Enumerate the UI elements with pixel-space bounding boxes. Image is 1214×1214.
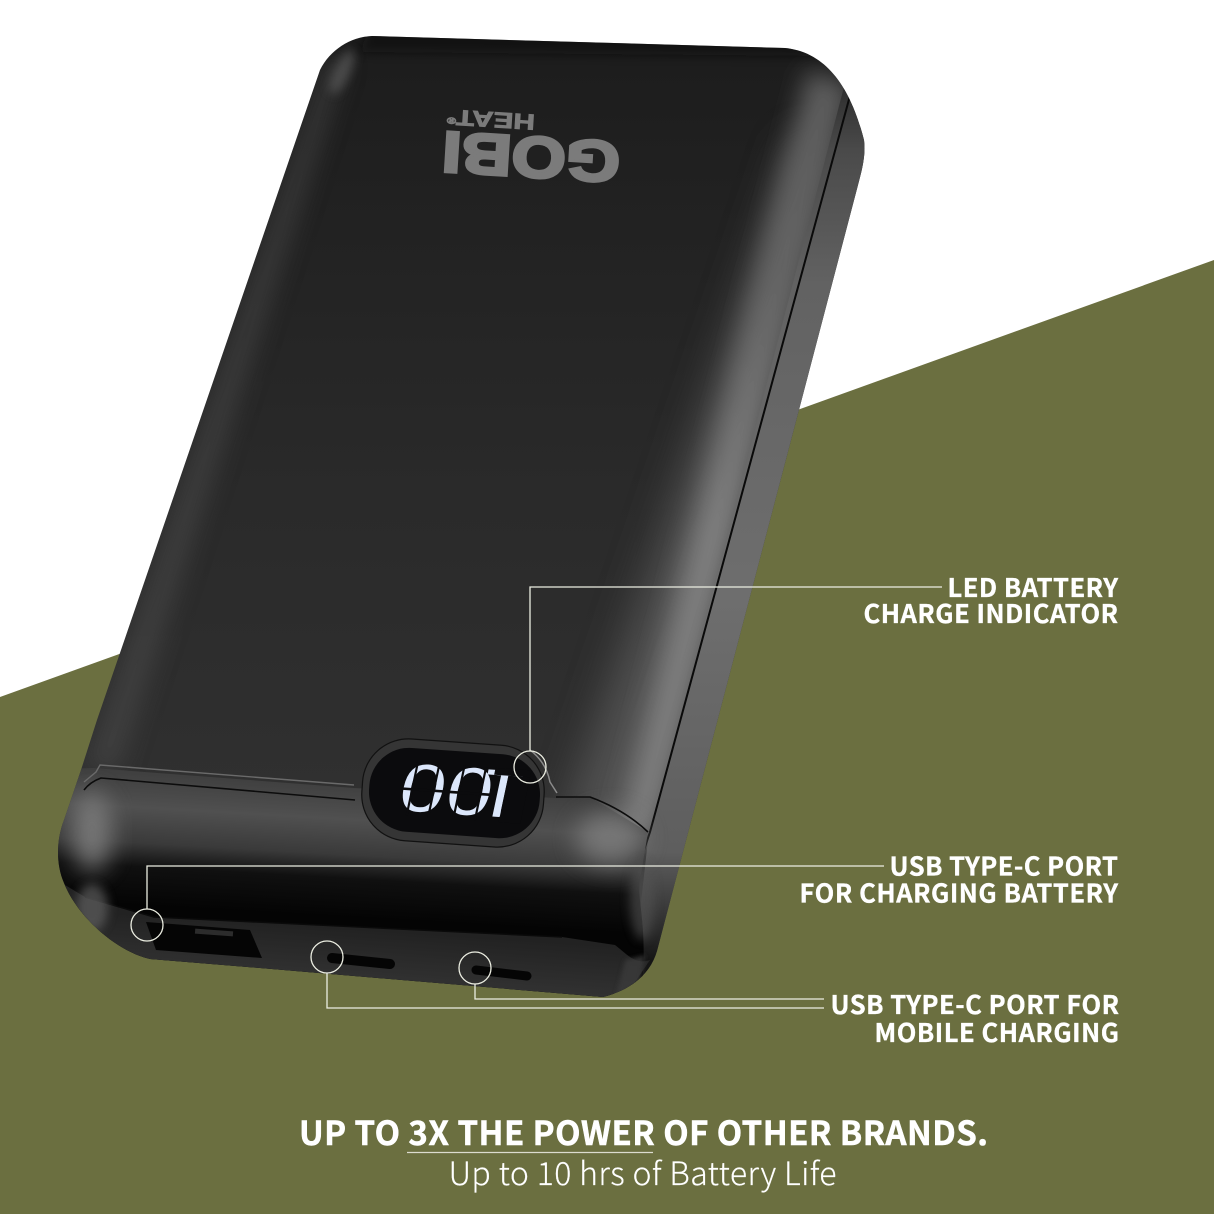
label: USB type-C port for mobile charging <box>830 985 1119 1050</box>
label: USB type-C port for charging battery: USB TYPE-C PORT <box>890 846 1118 884</box>
callout lines and markers <box>131 587 942 1008</box>
GOBI HEAT logo: ® <box>446 115 456 126</box>
callout: mobile charging leader two <box>459 952 824 999</box>
rail seam <box>640 92 851 862</box>
LED digits: 100 <box>393 749 533 833</box>
GOBI HEAT logo: HEAT <box>476 106 536 135</box>
USB-C port left <box>332 958 390 964</box>
USB-C port right <box>476 970 527 976</box>
LED display <box>359 736 557 850</box>
label: USB type-C port for mobile charging: MOBILE CHARGING <box>874 1013 1119 1050</box>
callout: LED indicator leader <box>514 587 942 783</box>
label: LED battery charge indicator: LED BATTERY <box>948 568 1118 605</box>
cap groove lines <box>84 765 354 785</box>
label: USB type-C port for mobile charging: USB TYPE-C PORT FOR <box>830 985 1119 1022</box>
GOBI HEAT logo <box>440 104 622 194</box>
label: USB type-C port for charging battery <box>800 846 1118 910</box>
callout: mobile charging leader one <box>311 941 824 1008</box>
label: LED battery charge indicator: CHARGE INDICATOR <box>864 594 1118 631</box>
USB-A port <box>146 922 262 958</box>
power bank device <box>40 20 890 1020</box>
label: USB type-C port for charging battery: FOR CHARGING BATTERY <box>800 874 1118 910</box>
port face <box>60 882 650 1004</box>
label: LED battery charge indicator <box>864 568 1118 631</box>
GOBI HEAT logo: GOBI <box>440 119 622 194</box>
callout: USB-C charging leader <box>131 866 884 941</box>
headline: UP TO 3X THE POWER OF OTHER BRANDS. <box>299 1107 988 1155</box>
subheading: Up to 10 hrs of Battery Life <box>448 1149 836 1195</box>
device body <box>40 20 890 1020</box>
end cap <box>40 768 648 1000</box>
olive diagonal background <box>0 260 1214 1214</box>
side rail <box>635 88 864 982</box>
